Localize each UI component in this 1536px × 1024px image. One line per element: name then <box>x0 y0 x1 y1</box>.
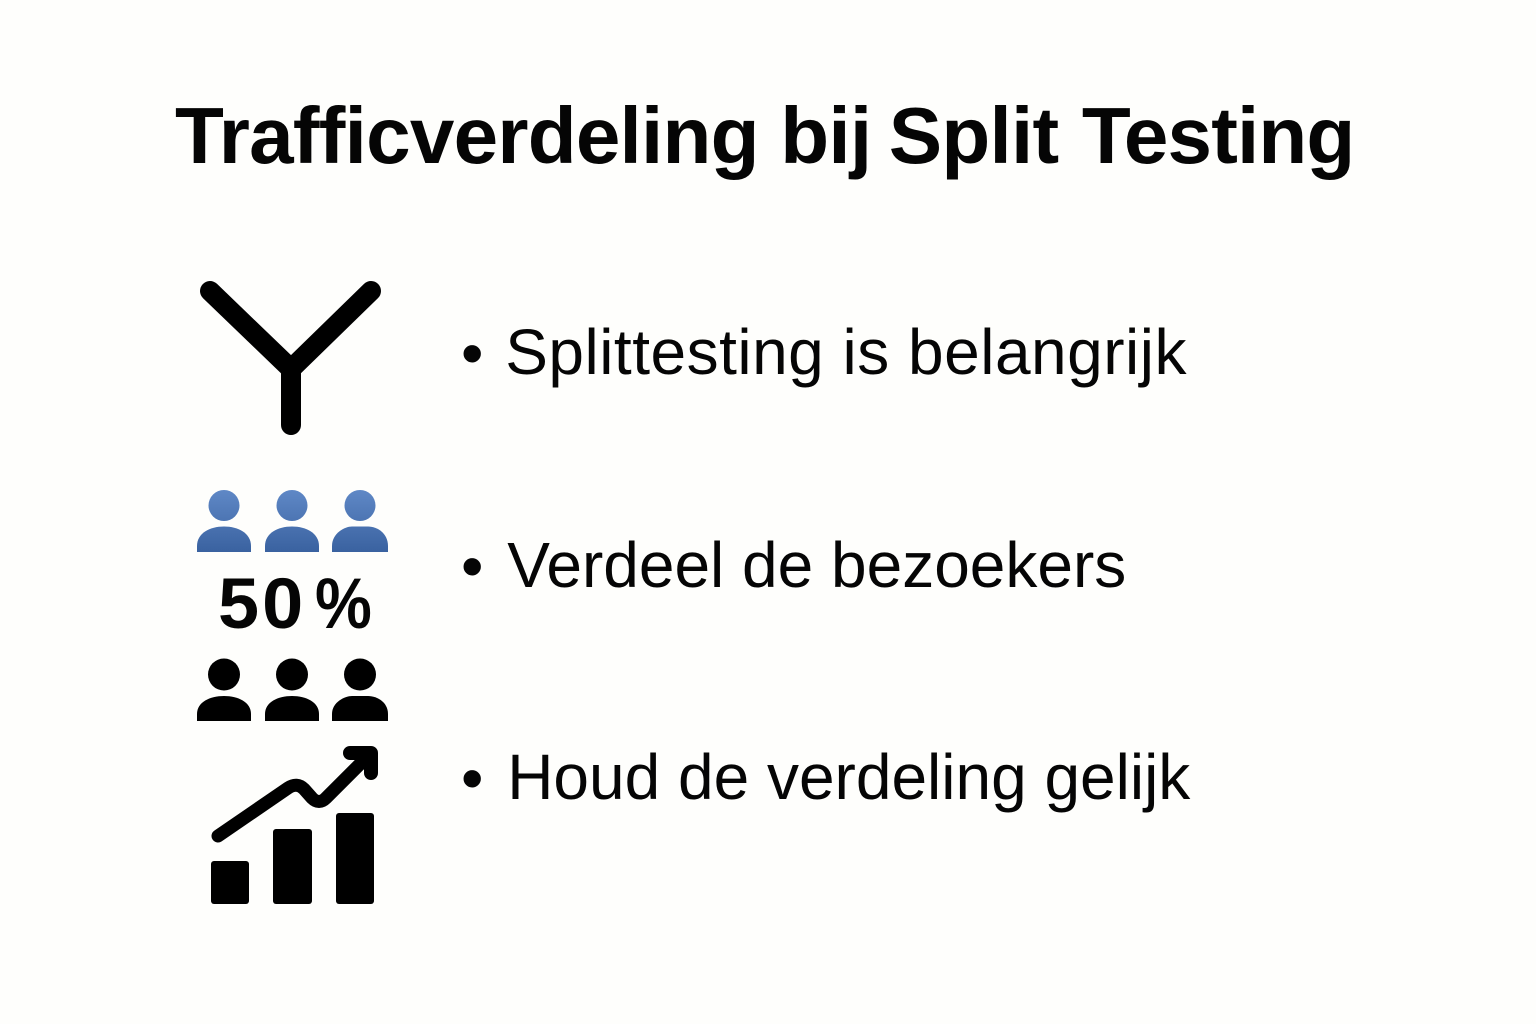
icon: growth chart <box>211 746 378 904</box>
bullet: Splittesting: • Splittesting is belangrijk <box>461 316 1187 389</box>
label: 50%: 50 <box>218 565 306 644</box>
title: Trafficverdeling bij Split Testing <box>175 91 1354 180</box>
bullet: Houd: • Houd de verdeling gelijk <box>461 741 1190 814</box>
icon: blue people row <box>197 490 388 552</box>
icon: black people row <box>197 658 388 721</box>
icon: split arrow <box>200 281 381 435</box>
label: 50% <box>218 565 372 644</box>
bullet: Verdeel: • Verdeel de bezoekers <box>461 529 1126 602</box>
label: 50%: % <box>315 565 372 644</box>
